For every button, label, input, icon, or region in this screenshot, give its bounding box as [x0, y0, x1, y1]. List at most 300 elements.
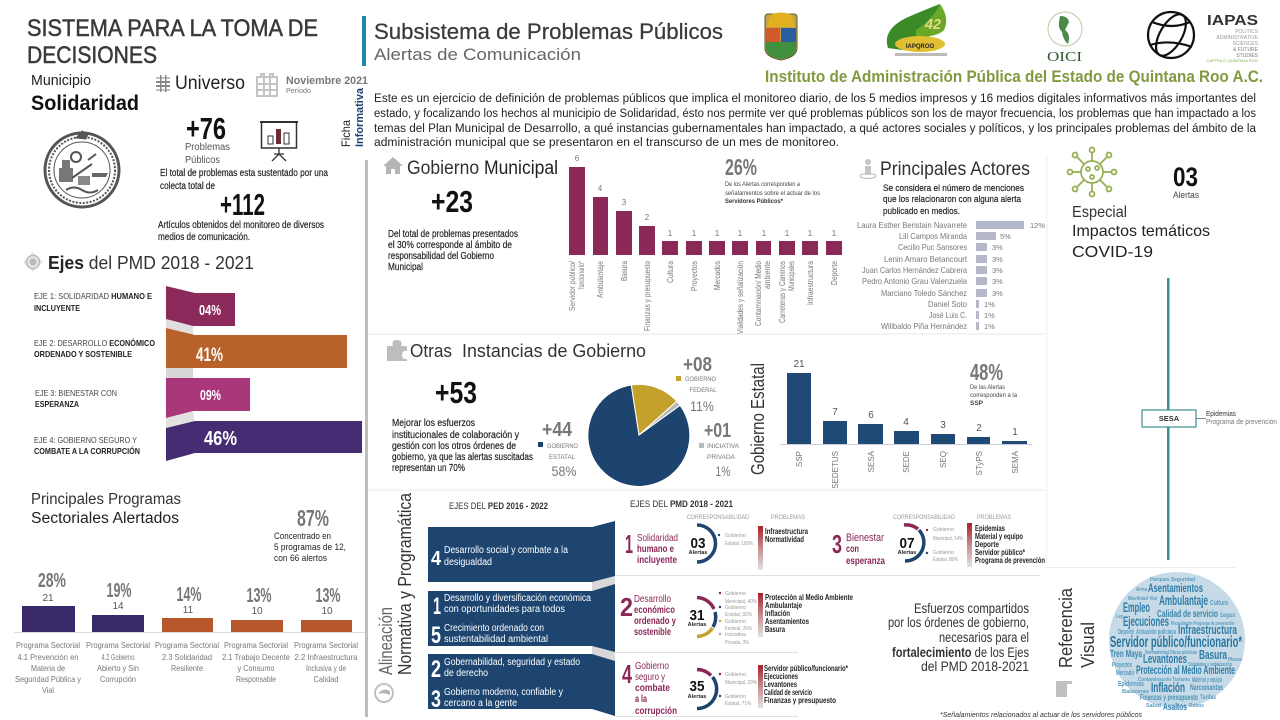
- bar chart: gobierno estatal: STyPS: [975, 451, 984, 475]
- heading: actores: Principales Actores: [880, 159, 1030, 180]
- bar chart: programas: Seguridad Pública y: [15, 674, 82, 684]
- ped block: ejes 1 y 5: Crecimiento ordenado con: [444, 623, 544, 634]
- heading: ejes: Ejes del PMD 2018 - 2021: [48, 252, 254, 273]
- bar chart: gobierno estatal: SEDE: [902, 451, 911, 473]
- logo: IAPAS globe: POLITICS: [1235, 29, 1259, 35]
- bar chart: gobierno estatal: SEMA: [1011, 450, 1020, 474]
- panel: ejes del pmd: [23, 252, 362, 461]
- pmd eje 4: Finanzas y presupuesto: [764, 696, 836, 705]
- municipality name: Solidaridad: [31, 92, 139, 115]
- word cloud: Balaceras: [1122, 689, 1149, 695]
- eje 3: [35, 378, 250, 418]
- heading: impactos: COVID-19: [1072, 244, 1153, 261]
- legend: gobierno federal: [676, 354, 717, 414]
- legend: iniciativa privada: PRIVADA: [707, 454, 736, 461]
- word cloud: Asaltos: [1163, 702, 1187, 713]
- panel: principales actores: [857, 159, 1045, 331]
- text: esfuerzos compartidos: por los órdenes de gobierno,: [888, 615, 1029, 630]
- intro paragraph: temas del Plan Municipal de Desarrollo, a qué instancias gubernamentales han impactado, a qué actores sociales y políticos, y los principales problemas del ámbito de la: [374, 123, 1257, 135]
- bar chart: gobierno estatal: [780, 359, 1032, 489]
- bar chart: programas: Programa Sectorial: [224, 640, 288, 650]
- pmd eje 1: [625, 525, 808, 570]
- pmd eje 4: Estatal, 71%: [725, 701, 751, 707]
- pmd eje 3: Estatal, 86%: [933, 557, 958, 563]
- pmd eje 2: Gobierno: [725, 591, 746, 597]
- panel: principales programas: [14, 491, 365, 695]
- bar chart: actores: Wilibaldo Piña Hernández: [881, 321, 967, 331]
- diagram: covid sesa: Epidemias: [1206, 411, 1236, 418]
- word cloud: Basura: [1199, 647, 1227, 662]
- intro paragraph: Este es un ejercicio de definición de problemas públicos que implica el monitoreo diario, de los 5 medios impresos y 16 medios digitales informativos más importantes del: [374, 93, 1256, 105]
- callout: 87%: 87%: [297, 505, 329, 531]
- callout: 48%: De las Alertas: [970, 384, 1006, 391]
- bar chart: programas: Programa Sectorial: [16, 640, 80, 650]
- column subheads: PROBLEMAS: [977, 514, 1012, 521]
- panel: municipio: Municipio: [31, 72, 91, 89]
- diagram: covid sesa: [1142, 278, 1277, 560]
- eje 1: INCLUYENTE: [34, 303, 80, 313]
- logo: OICI: OICI: [1047, 50, 1082, 65]
- legend: gobierno estatal: +44: [542, 419, 573, 441]
- pmd eje 2: [620, 591, 853, 646]
- stat: +112: +112: [220, 187, 265, 222]
- text: colecta: [160, 168, 328, 192]
- pmd eje 3: Deporte: [975, 540, 999, 549]
- ped block: ejes 2 y 3: 3: [431, 686, 441, 713]
- pmd eje 2: Federal, 26%: [725, 626, 752, 632]
- bar chart: problemas municipales: Contaminación/ Medio: [754, 261, 763, 326]
- ped block: ejes 1 y 5: 5: [431, 622, 441, 649]
- ped block: eje 4: 4: [431, 548, 442, 570]
- heading: referencia visual: Visual: [1078, 622, 1098, 668]
- stat: +76 problemas: [185, 111, 230, 166]
- bar chart: programas: Abierto y Sin: [97, 663, 139, 673]
- pmd eje 2: económico: [634, 605, 675, 616]
- bar chart: programas: 21: [42, 593, 54, 604]
- pmd eje 2: Iniciativa: [725, 632, 747, 638]
- pmd eje 4: Gobierno: [635, 661, 669, 672]
- ped block: ejes 1 y 5: 1: [433, 593, 441, 620]
- bar chart: problemas municipales: funcionario*: [577, 261, 586, 289]
- heading: programas: Principales Programas: [31, 491, 181, 508]
- bar chart: programas: Responsable: [236, 674, 276, 684]
- word cloud: Calidad de servicio: [1157, 609, 1218, 620]
- callout: 48%: [970, 359, 1017, 407]
- bar chart: actores: Juan Carlos Hernández Cabrera: [862, 265, 967, 275]
- bar chart: programas: 14%: [176, 584, 202, 606]
- callout: 48%: corresponden a la: [970, 392, 1017, 399]
- pmd eje 2: Privada, 3%: [725, 640, 749, 646]
- eje 3: EJE 3: BIENESTAR CON: [35, 388, 117, 398]
- bar chart: actores: 3%: [992, 255, 1003, 264]
- bar chart: gobierno estatal: 7: [832, 407, 838, 418]
- pmd eje 4: Gobierno: [725, 694, 746, 700]
- word cloud: Mercado: [1116, 670, 1134, 677]
- heading: alineacion: Normativa y Programática: [395, 492, 415, 675]
- bar chart: programas: 4.1 Prevención en: [18, 652, 79, 662]
- logo: IAPAS globe: IAPAS: [1207, 12, 1258, 29]
- panel: covid: [1068, 148, 1277, 560]
- word cloud: Normatividad Obras públicas: [1145, 650, 1197, 656]
- bar chart: programas: 4.2 Gobierno: [102, 652, 135, 662]
- callout: 87%: Concentrado en: [274, 531, 331, 542]
- bar chart: gobierno estatal: 4: [903, 417, 909, 428]
- word cloud: Sargazo: [1220, 613, 1235, 619]
- text: gobierno municipal: responsabilidad del Gobierno: [388, 251, 494, 262]
- bar chart: problemas municipales: Ambulantaje: [596, 261, 605, 298]
- legend: gobierno federal: GOBIERNO: [685, 376, 716, 383]
- bar chart: problemas municipales: 1: [738, 229, 743, 238]
- bar chart: actores: Pedro Antonio Grau Valenzuela: [862, 276, 967, 286]
- bar chart: problemas municipales: Servidor público/: [568, 260, 577, 311]
- word cloud: Levantones: [1143, 651, 1187, 666]
- stat: +76 problemas: +76: [186, 111, 226, 146]
- bar chart: actores: 3%: [992, 243, 1003, 252]
- bar chart: actores: [857, 220, 1045, 331]
- heading: referencia visual: Referencia: [1056, 587, 1076, 668]
- text: gobierno municipal: [388, 229, 518, 273]
- ped block: ejes 1 y 5: Desarrollo y diversificación económica: [444, 593, 591, 604]
- bar chart: problemas municipales: Carreteras y Caminos: [778, 261, 787, 323]
- callout: 87%: 5 programas de 12,: [274, 542, 346, 553]
- panel: gobierno municipal: [383, 154, 842, 334]
- callout: 26%: Servidores Públicos*: [725, 198, 783, 205]
- word cloud: Epidemias: [1118, 681, 1144, 688]
- bar chart: programas: Materia de: [31, 663, 65, 673]
- icon: municipal emblem: [45, 131, 119, 207]
- callout: 87%: [274, 505, 346, 564]
- legend: gobierno estatal: [538, 419, 578, 479]
- bar chart: programas: 10: [251, 606, 263, 617]
- intro paragraph: [374, 93, 1257, 149]
- bar chart: actores: 12%: [1030, 221, 1045, 230]
- bar chart: problemas municipales: Vialidades y señalización: [736, 261, 745, 334]
- ped block: ejes 2 y 3: [428, 654, 615, 716]
- word cloud: Finanzas y presupuesto: [1140, 693, 1198, 702]
- bar chart: problemas municipales: 1: [762, 229, 767, 238]
- word cloud: Parques Seguridad: [1150, 577, 1195, 583]
- bar chart: problemas municipales: 1: [832, 229, 837, 238]
- pmd eje 4: [622, 659, 849, 717]
- ficha informativa: [339, 87, 366, 147]
- bar chart: programas: Programa Sectorial: [86, 640, 150, 650]
- text: actores: Se considera el número de menciones: [883, 183, 1024, 194]
- pmd eje 2: 2: [620, 592, 633, 622]
- bar chart: programas: Calidad: [314, 674, 339, 684]
- bar chart: gobierno estatal: 21: [793, 359, 805, 370]
- bar chart: programas: 11: [183, 605, 194, 616]
- bar chart: problemas municipales: 1: [668, 229, 673, 238]
- bar chart: actores: 3%: [992, 277, 1003, 286]
- subsystem heading: [374, 19, 723, 64]
- heading: referencia visual: [1056, 587, 1098, 668]
- word cloud: Material y equipo: [1192, 677, 1222, 684]
- bar chart: actores: Marciano Toledo Sánchez: [881, 288, 967, 298]
- bar chart: problemas municipales: Cultura: [666, 261, 675, 283]
- pmd eje 2: Desarrollo: [634, 594, 671, 605]
- word cloud: Cultura: [1210, 600, 1228, 607]
- bar chart: actores: 3%: [992, 289, 1003, 298]
- title: SISTEMA PARA LA TOMA DE: [27, 15, 318, 42]
- bar chart: problemas municipales: Infraestructura: [806, 261, 815, 305]
- bar chart: actores: 5%: [1000, 232, 1011, 241]
- bar chart: programas: 13%: [316, 585, 341, 607]
- icon: presentation board: [260, 121, 298, 161]
- bar chart: programas: 2.3 Solidaridad: [162, 652, 212, 662]
- intro paragraph: administración municipal que se presentaron en el transcurso de un mes de monitoreo.: [374, 137, 839, 149]
- eje 4: [34, 421, 362, 461]
- bar chart: programas: Inclusiva y de: [306, 663, 346, 673]
- panel: referencia visual: [1056, 572, 1245, 713]
- text: esfuerzos compartidos: Esfuerzos compartidos: [914, 601, 1029, 616]
- text: gobierno municipal: Municipal: [388, 262, 423, 273]
- word cloud: Movilidad Vial: [1128, 596, 1157, 602]
- bar chart: problemas municipales: 1: [715, 229, 720, 238]
- eje 3: 09%: [200, 387, 221, 404]
- pmd eje 1: Gobierno: [725, 533, 746, 539]
- title: [27, 15, 318, 69]
- text: actores: [883, 183, 1024, 217]
- callout: 48%: 48%: [970, 359, 1003, 385]
- logo: IAPQROO leaf: IAPQROO: [906, 44, 934, 50]
- logo: OICI: [1047, 12, 1082, 65]
- stat: +53: +53: [435, 375, 477, 410]
- bar chart: programas: Corrupción: [100, 674, 136, 684]
- pie chart: [588, 384, 690, 486]
- bar chart: gobierno estatal: 3: [940, 420, 946, 431]
- pmd eje 4: corrupción: [635, 706, 677, 717]
- icon: calendar: [257, 74, 277, 96]
- bar chart: programas: 10: [321, 606, 333, 617]
- pmd eje 2: Estatal, 32%: [725, 612, 752, 618]
- text: esfuerzos compartidos: [888, 601, 1029, 674]
- callout: 26%: señalamientos sobre el actuar de los: [725, 190, 821, 197]
- bar chart: programas: Programa Sectorial: [294, 640, 358, 650]
- legend: gobierno federal: +08: [683, 354, 712, 376]
- bar chart: problemas municipales: 2: [645, 213, 650, 222]
- legend: iniciativa privada: INICIATIVA: [707, 443, 740, 450]
- legend: gobierno federal: FEDERAL: [690, 387, 717, 394]
- bar chart: gobierno estatal: SSP: [795, 451, 804, 467]
- intro paragraph: estado, y focalizando los hechos al municipio de Solidaridad, ésto nos permite ver qué problemas públicos son los de mayor frecuencia, los problemas que han impactado a los: [374, 108, 1256, 120]
- callout: 26%: De los Alertas corresponden a: [725, 181, 800, 188]
- word cloud: Infraestructura: [1178, 622, 1237, 637]
- logo: IAPQROO leaf: 42: [924, 16, 942, 33]
- bar chart: problemas municipales: ambiente: [763, 261, 772, 289]
- pmd eje 3: Programa de prevención: [975, 556, 1045, 565]
- pmd eje 3: 3: [832, 529, 842, 559]
- footnote: *Señalamientos relacionados al actuar de los servidores públicos: [940, 710, 1142, 719]
- ped block: ejes 1 y 5: con oportunidades para todos: [444, 604, 565, 615]
- ped block: ejes 2 y 3: cercano a la gente: [444, 698, 517, 709]
- icon: referencia: [1056, 681, 1072, 697]
- ped block: eje 4: Desarrollo social y combate a la: [444, 545, 568, 556]
- bar chart: problemas municipales: Basura: [620, 261, 629, 281]
- bar chart: actores: Lili Campos Miranda: [899, 231, 967, 241]
- bar chart: programas: 28%: [38, 570, 66, 592]
- word cloud: Ejecuciones: [1123, 613, 1169, 629]
- icon: puzzle: [387, 340, 407, 361]
- panel: otras instancias: [387, 340, 740, 486]
- word cloud: Tarifas: [1200, 695, 1217, 701]
- logo: Quintana Roo shield: [765, 12, 797, 60]
- text: actores: publicado en medios.: [883, 206, 960, 217]
- text: otras instancias: Mejorar los esfuerzos: [392, 418, 475, 429]
- pmd eje 2: sostenible: [634, 627, 671, 638]
- bar chart: actores: Laura Esther Beristain Navarrete: [857, 220, 967, 230]
- eje 1: EJE 1: SOLIDARIDAD HUMANO E: [34, 291, 152, 301]
- legend: gobierno estatal: ESTATAL: [549, 454, 575, 461]
- bar chart: programas: [14, 570, 365, 695]
- logo: IAPAS globe: ADMINISTRATIVE: [1216, 35, 1259, 41]
- eje 4: 46%: [204, 428, 237, 450]
- column heading: ped: EJES DEL PED 2016 - 2022: [449, 501, 548, 511]
- text: colecta: colecta total de: [160, 181, 215, 192]
- bar chart: programas: 2.2 Infraestructura: [294, 652, 358, 662]
- ped block: ejes 1 y 5: [428, 584, 615, 652]
- word cloud: Salud: [1146, 703, 1161, 709]
- pmd eje 3: esperanza: [846, 556, 885, 567]
- pmd eje 3: 07: [900, 535, 914, 552]
- heading: impactos: [1072, 204, 1210, 261]
- icon: person: [860, 159, 876, 178]
- ficha informativa: Informativa: [354, 87, 366, 147]
- eje 2: EJE 2: DESARROLLO ECONÓMICO: [34, 337, 155, 348]
- panel: municipio: [31, 72, 139, 207]
- stat: +76 problemas: Problemas: [185, 142, 230, 153]
- pmd eje 3: con: [846, 544, 859, 555]
- pmd eje 3: Alertas: [898, 550, 916, 556]
- pmd eje 3: [832, 523, 1045, 567]
- heading: otras instancias: Otras: [410, 341, 452, 361]
- ped block: ejes 2 y 3: de derecho: [444, 668, 488, 679]
- legend: iniciativa privada: [699, 420, 740, 479]
- bar chart: programas: 2.1 Trabajo Decente: [222, 652, 290, 662]
- heading: programas: [31, 491, 181, 527]
- pmd eje 4: combate: [635, 683, 670, 694]
- title: DECISIONES: [27, 42, 157, 69]
- bar chart: problemas municipales: Finanzas y presupuesto: [643, 261, 652, 331]
- ped block: eje 4: desigualdad: [444, 557, 492, 568]
- eje 2: [34, 328, 347, 368]
- icon: virus: [1068, 148, 1116, 196]
- bar chart: problemas municipales: 6: [575, 154, 580, 163]
- bar chart: gobierno estatal: 6: [868, 410, 874, 421]
- eje 2: 41%: [196, 345, 223, 366]
- pmd eje 4: Municipal, 29%: [725, 680, 757, 686]
- text: actores: que los relacionaron con alguna alerta: [883, 194, 1022, 205]
- heading: gobierno municipal: Gobierno Municipal: [407, 158, 558, 179]
- callout: 87%: con 66 alertos: [274, 553, 327, 564]
- legend: iniciativa privada: 1%: [716, 463, 730, 479]
- period label: Período: [286, 88, 311, 95]
- pmd eje 2: Alertas: [688, 622, 706, 628]
- word cloud: Arma: [1136, 587, 1148, 593]
- stat: 03 alertas: 03: [1173, 162, 1198, 192]
- bar chart: problemas municipales: 1: [692, 229, 697, 238]
- word cloud: Ambulantaje: [1159, 592, 1208, 608]
- heading: gobierno estatal: Gobierno Estatal: [748, 363, 768, 475]
- pmd eje 4: Ejecuciones: [764, 672, 798, 681]
- word cloud: Tren Maya: [1110, 649, 1142, 660]
- pmd eje 4: Levantones: [764, 680, 797, 689]
- word cloud: Ley: [1116, 614, 1124, 620]
- pmd eje 3: Servidor público*: [975, 548, 1026, 557]
- text: otras instancias: institucionales de colaboración y: [392, 430, 519, 441]
- heading: otras instancias: Instancias de Gobierno: [462, 341, 646, 361]
- bar chart: programas: Programa Sectorial: [155, 640, 219, 650]
- heading: alineacion: Alineación: [376, 607, 396, 675]
- word cloud: [1109, 572, 1245, 713]
- text: articulos: [158, 220, 324, 243]
- logo: IAPAS globe: [1148, 10, 1259, 63]
- bar chart: problemas municipales: [568, 154, 842, 334]
- eje 4: COMBATE A LA CORRUPCIÓN: [34, 445, 140, 456]
- logo: IAPAS globe: CAPÍTULO QUINTANA ROO: [1206, 58, 1258, 63]
- logos row: [765, 4, 1259, 65]
- pmd eje 2: Gobierno: [725, 605, 746, 611]
- word cloud: Inflación: [1151, 679, 1185, 695]
- eje 3: ESPERANZA: [35, 399, 79, 409]
- column subheads: CORRESPONSABILIDAD: [687, 514, 749, 521]
- heading: programas: Sectoriales Alertados: [31, 510, 179, 527]
- pmd eje 1: Solidaridad: [637, 533, 678, 544]
- bar chart: actores: 3%: [992, 266, 1003, 275]
- eje 1: 04%: [199, 302, 221, 319]
- panel: universo: [156, 73, 368, 243]
- word cloud: Asentamientos: [1148, 581, 1203, 595]
- word cloud: Deporte: [1118, 629, 1134, 636]
- bar chart: problemas municipales: Municipales: [787, 261, 796, 291]
- pmd eje 3: Gobierno: [933, 550, 954, 556]
- eje 2: ORDENADO Y SOSTENIBLE: [34, 349, 132, 359]
- text: esfuerzos compartidos: fortalecimiento de los Ejes: [892, 645, 1029, 660]
- bar chart: programas: 13%: [246, 585, 272, 607]
- ped block: ejes 2 y 3: 2: [431, 656, 441, 683]
- panel: gobierno estatal: [748, 359, 1032, 489]
- column subheads: CORRESPONSABILIDAD: [893, 514, 955, 521]
- word cloud: Vialidades y señalización: [1188, 662, 1232, 668]
- pmd eje 1: Normatividad: [765, 535, 804, 544]
- bar chart: gobierno estatal: SEQ: [939, 451, 948, 468]
- text: esfuerzos compartidos: del PMD 2018-2021: [921, 659, 1029, 674]
- pmd eje 3: Epidemias: [975, 524, 1005, 533]
- word cloud: Robos: [1189, 703, 1204, 709]
- column subheads: PROBLEMAS: [771, 514, 806, 521]
- ped block: ejes 2 y 3: Gobierno moderno, confiable y: [444, 687, 563, 698]
- bar chart: programas: Resiliente: [171, 663, 203, 673]
- pmd eje 4: Gobierno: [725, 672, 746, 678]
- text: otras instancias: [392, 418, 533, 474]
- pmd eje 1: 03: [690, 535, 706, 552]
- bar chart: actores: José Luis C.: [929, 310, 967, 320]
- word cloud: Empleo: [1123, 599, 1150, 615]
- legend: iniciativa privada: +01: [704, 420, 731, 442]
- word cloud: Proyectos: [1112, 662, 1132, 669]
- icon: target: [23, 252, 43, 272]
- bar chart: gobierno estatal: SESA: [867, 450, 876, 472]
- pmd eje 4: Servidor público/funcionario*: [764, 664, 849, 673]
- bar chart: actores: Daniel Soto: [928, 299, 967, 309]
- pmd eje 1: 1: [625, 529, 633, 559]
- period label: [286, 75, 368, 95]
- bar chart: problemas municipales: 1: [808, 229, 813, 238]
- pmd eje 3: Material y equipo: [975, 532, 1023, 541]
- logo: IAPAS globe: STUDIES: [1236, 53, 1259, 59]
- pmd eje 2: Inflación: [765, 609, 790, 618]
- word cloud: Narcomantas: [1190, 683, 1223, 692]
- pmd eje 4: 35: [690, 678, 704, 695]
